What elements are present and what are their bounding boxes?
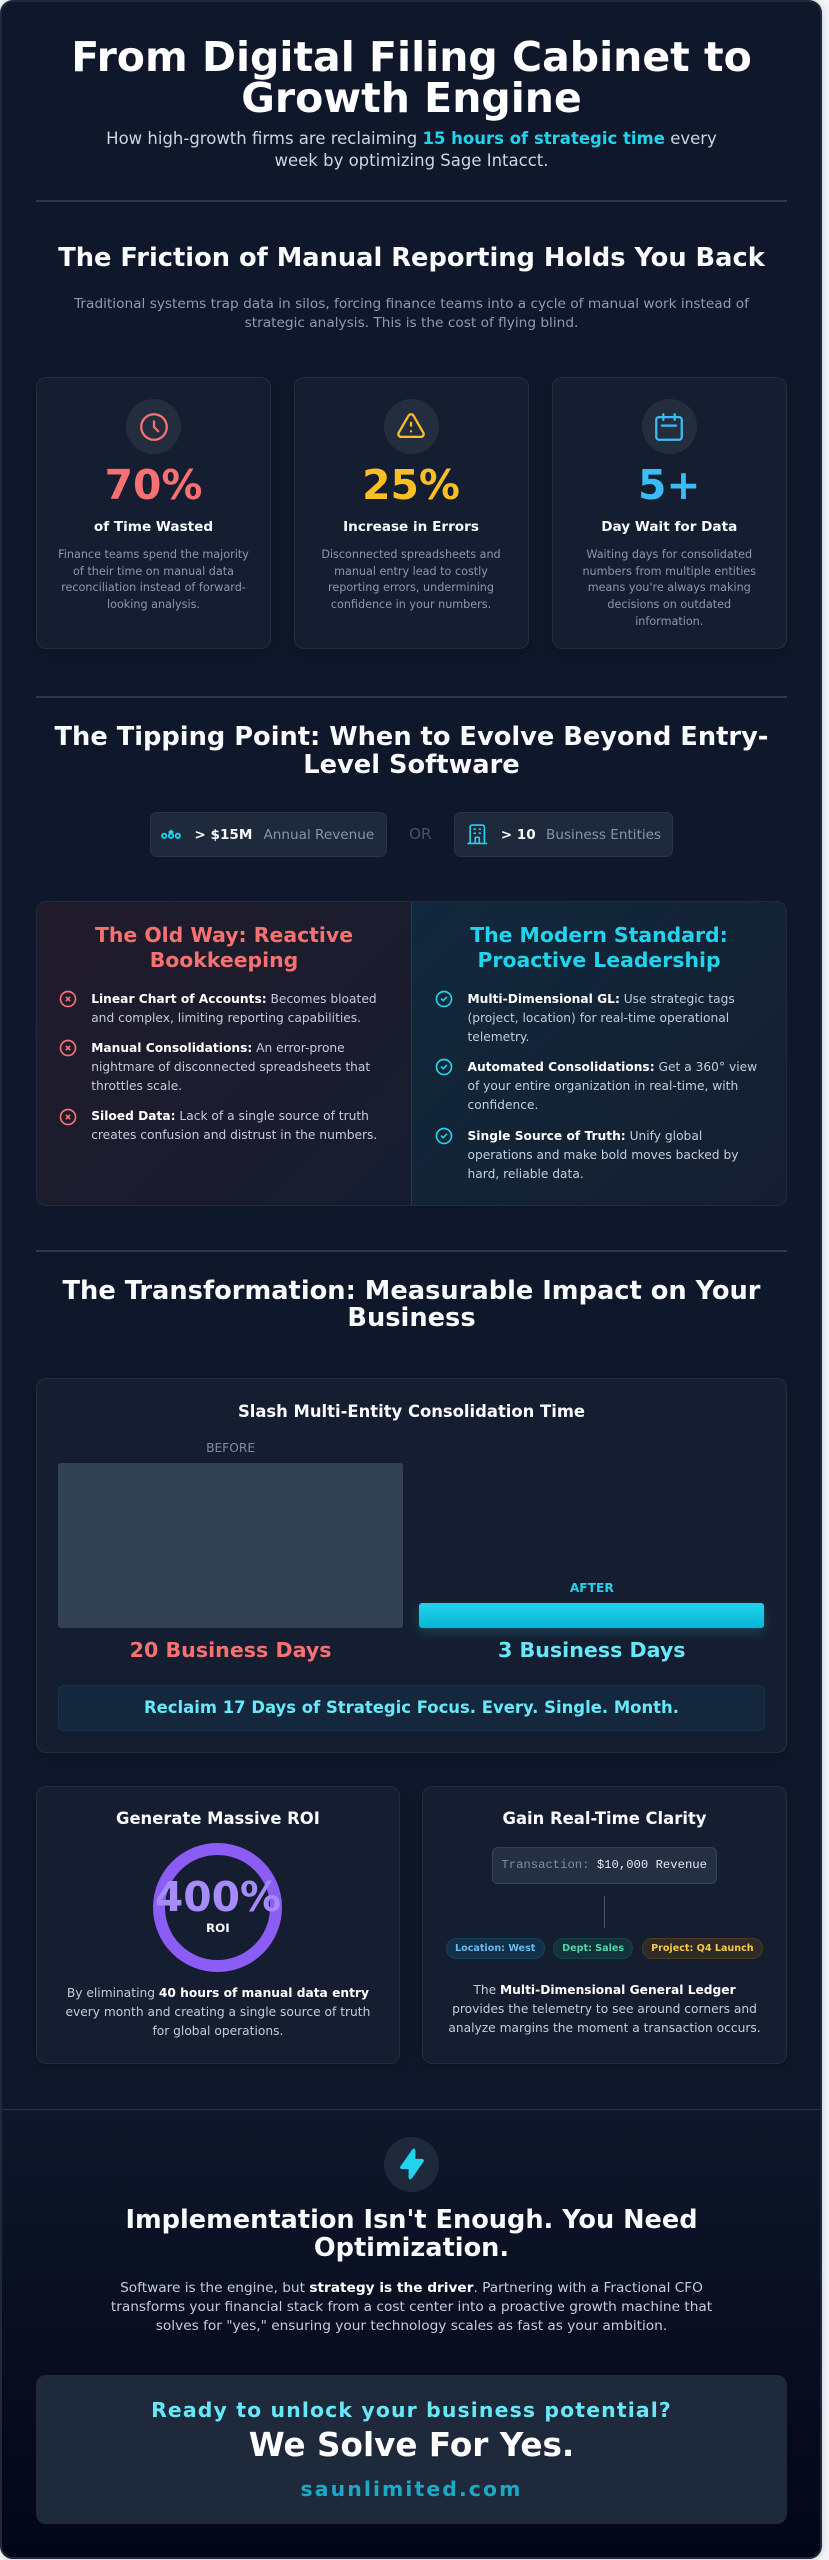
title (71, 33, 752, 122)
list item: linear chart of accounts: Linear Chart of Accounts: Becomes bloated (91, 992, 377, 1006)
list item: manual consolidations: throttles scale. (91, 1079, 182, 1093)
icon: revenue glyph (161, 830, 181, 839)
heading: optimization: Optimization. (314, 2233, 509, 2263)
list item: single source of truth: hard, reliable data. (468, 1167, 584, 1181)
list item: siloed data: Siloed Data: Lack of a single source of truth (91, 1109, 369, 1123)
threshold value: > $15M (194, 827, 252, 843)
panel: stat card 5+ day wait (552, 377, 787, 649)
bar label: before: BEFORE (206, 1441, 255, 1455)
heading: transformation section: The Transformation: Measurable Impact on Your (63, 1276, 760, 1306)
stat description: manual entry lead to costly (334, 565, 488, 578)
text: ROI description: By eliminating 40 hours of manual data entry (67, 1986, 369, 2000)
heading: old way (95, 923, 353, 972)
list item: automated consolidations (436, 1058, 757, 1112)
icon: building (467, 824, 488, 844)
list item: manual consolidations: Manual Consolidations: An error-prone (91, 1041, 345, 1055)
icon: lightning bolt (384, 2136, 439, 2192)
list item: multi-dimensional GL: telemetry. (468, 1030, 529, 1044)
list item: siloed data (60, 1108, 377, 1142)
stat description: of their time on manual data (73, 565, 234, 578)
callout: reclaim 17 days: Reclaim 17 Days of Strategic Focus. Every. Single. Month. (144, 1698, 679, 1717)
text: OR separator: OR (409, 825, 432, 843)
callout: reclaim 17 days (58, 1685, 765, 1731)
list item: multi-dimensional GL (436, 990, 735, 1044)
text: optimization paragraph: Software is the engine, but strategy is the driver. Partnering with a Fractional CFO (120, 2280, 703, 2296)
transaction box: Transaction: $10,000 Revenue (501, 1858, 707, 1872)
panel: consolidation time bar chart (36, 1378, 787, 1753)
stat description: reporting errors, undermining (328, 581, 494, 594)
heading: tipping point section: Level Software (303, 750, 520, 780)
icon: calendar (642, 399, 696, 454)
tag: department: Dept: Sales (562, 1943, 624, 1954)
text: friction description: strategic analysis. This is the cost of flying blind. (245, 315, 578, 331)
tag: project (642, 1938, 763, 1959)
list item: linear chart of accounts: and complex, limiting reporting capabilities. (91, 1011, 361, 1025)
heading: modern standard: Proactive Leadership (477, 948, 721, 972)
list item: multi-dimensional GL: Multi-Dimensional GL: Use strategic tags (468, 992, 735, 1006)
stat description: decisions on outdated (607, 598, 731, 611)
stat description: Finance teams spend the majority (58, 548, 249, 561)
text: ROI description (65, 1986, 370, 2038)
stat description (321, 548, 501, 611)
stat description (58, 548, 249, 611)
panel: footer gradient background (0, 2108, 826, 2560)
stat number: 5+ (638, 461, 701, 509)
panel: stat card 25% errors (294, 377, 528, 649)
icon: clock (126, 399, 181, 454)
panel: real-time clarity card (422, 1786, 787, 2064)
stat description: means you're always making (588, 581, 751, 594)
panel: stat card 70% time wasted (36, 377, 271, 649)
stat description: Waiting days for consolidated (586, 548, 752, 561)
list item: manual consolidations (60, 1040, 370, 1093)
heading: tipping point section: The Tipping Point: When to Evolve Beyond Entry- (55, 722, 768, 752)
subtitle: week by optimizing Sage Intacct. (274, 151, 548, 170)
icon: warning triangle (384, 399, 438, 454)
tag: location: Location: West (455, 1943, 535, 1954)
bar label: after: AFTER (570, 1581, 614, 1595)
text: friction description (74, 296, 750, 331)
transaction box (492, 1847, 717, 1884)
heading: transformation section (62, 1276, 760, 1333)
list item: linear chart of accounts (60, 990, 377, 1025)
stat description: Disconnected spreadsheets and (321, 548, 501, 561)
column: old way (37, 902, 411, 1205)
chart title: Slash Multi-Entity Consolidation Time (238, 1402, 585, 1421)
list item: multi-dimensional GL: (project, location) for real-time operational (468, 1011, 729, 1025)
stat description: confidence in your numbers. (331, 598, 491, 611)
stat label: Increase in Errors (343, 519, 479, 535)
stat description: reconciliation instead of forward- (61, 581, 246, 594)
tag: department (553, 1938, 633, 1959)
list item: automated consolidations: of your entire organization in real-time, with (468, 1079, 738, 1093)
text: ROI description: for global operations. (152, 2024, 283, 2038)
connector line (604, 1896, 605, 1928)
threshold value: > 10 (501, 827, 536, 843)
CTA headline: We Solve For Yes. (249, 2426, 574, 2464)
ring value: 400% (155, 1873, 281, 1921)
text: clarity description: analyze margins the moment a transaction occurs. (448, 2021, 761, 2035)
heading: optimization (125, 2205, 698, 2263)
threshold label: Business Entities (546, 827, 661, 843)
heading: modern standard: The Modern Standard: (470, 923, 728, 947)
list item: single source of truth (436, 1128, 738, 1181)
CTA website: saunlimited.com (301, 2477, 522, 2501)
stat label: Day Wait for Data (601, 519, 737, 535)
stat description: looking analysis. (107, 598, 200, 611)
stat description: numbers from multiple entities (582, 565, 756, 578)
panel: call to action (36, 2375, 787, 2524)
pill: entities threshold (454, 812, 673, 857)
heading: old way: The Old Way: Reactive (95, 923, 353, 947)
ring label: ROI (206, 1921, 230, 1935)
text: optimization paragraph: transforms your financial stack from a cost center into a proactive growth machine that (111, 2299, 712, 2315)
text: clarity description: provides the telemetry to see around corners and (452, 2002, 757, 2016)
list item: automated consolidations: Automated Consolidations: Get a 360° view (468, 1060, 757, 1074)
heading: old way: Bookkeeping (150, 948, 298, 972)
stat number: 70% (105, 461, 202, 509)
list item: single source of truth: operations and make bold moves backed by (468, 1148, 738, 1162)
text: friction description: Traditional systems trap data in silos, forcing finance teams into a cycle of manual work instead of (74, 296, 749, 312)
heading: friction section: The Friction of Manual Reporting Holds You Back (58, 243, 765, 273)
column: modern standard (411, 902, 786, 1205)
stat description: information. (635, 615, 703, 628)
subtitle: How high-growth firms are reclaiming 15 hours of strategic time every (106, 129, 717, 148)
text: clarity description: The Multi-Dimensional General Ledger (473, 1983, 736, 1997)
title: Growth Engine (241, 74, 582, 122)
heading: tipping point section (54, 722, 768, 780)
tag: project: Project: Q4 Launch (651, 1943, 754, 1954)
pill: revenue threshold (150, 812, 387, 857)
tag: location (446, 1938, 545, 1959)
stat label: of Time Wasted (94, 519, 213, 535)
stat description (582, 548, 756, 628)
stat number: 25% (362, 461, 460, 509)
card title: Gain Real-Time Clarity (503, 1809, 706, 1828)
list item: single source of truth: Single Source of Truth: Unify global (468, 1128, 702, 1142)
text: optimization paragraph: solves for "yes," ensuring your technology scales as fast as your ambition. (156, 2318, 667, 2334)
panel: ROI card (36, 1786, 400, 2064)
text: optimization paragraph (111, 2280, 712, 2334)
chart: 400% ROI ring (153, 1843, 282, 1972)
bar: after (419, 1603, 764, 1628)
bar: before (58, 1463, 403, 1628)
heading: transformation section: Business (347, 1303, 476, 1333)
list item: manual consolidations: nightmare of disconnected spreadsheets that (91, 1060, 370, 1074)
panel: old way vs modern standard comparison (36, 901, 787, 1206)
title: From Digital Filing Cabinet to (71, 33, 752, 81)
heading: optimization: Implementation Isn't Enough. You Need (125, 2205, 698, 2235)
value: before: 20 Business Days (130, 1638, 332, 1662)
heading: modern standard (470, 923, 728, 972)
card title: Generate Massive ROI (116, 1809, 320, 1828)
CTA question: Ready to unlock your business potential? (151, 2398, 672, 2422)
text: clarity description (448, 1983, 761, 2035)
text: ROI description: every month and creating a single source of truth (65, 2005, 370, 2019)
value: after: 3 Business Days (498, 1638, 686, 1662)
threshold label: Annual Revenue (263, 827, 374, 843)
list item: siloed data: creates confusion and distrust in the numbers. (91, 1128, 377, 1142)
list item: automated consolidations: confidence. (468, 1098, 538, 1112)
subtitle (106, 129, 717, 170)
